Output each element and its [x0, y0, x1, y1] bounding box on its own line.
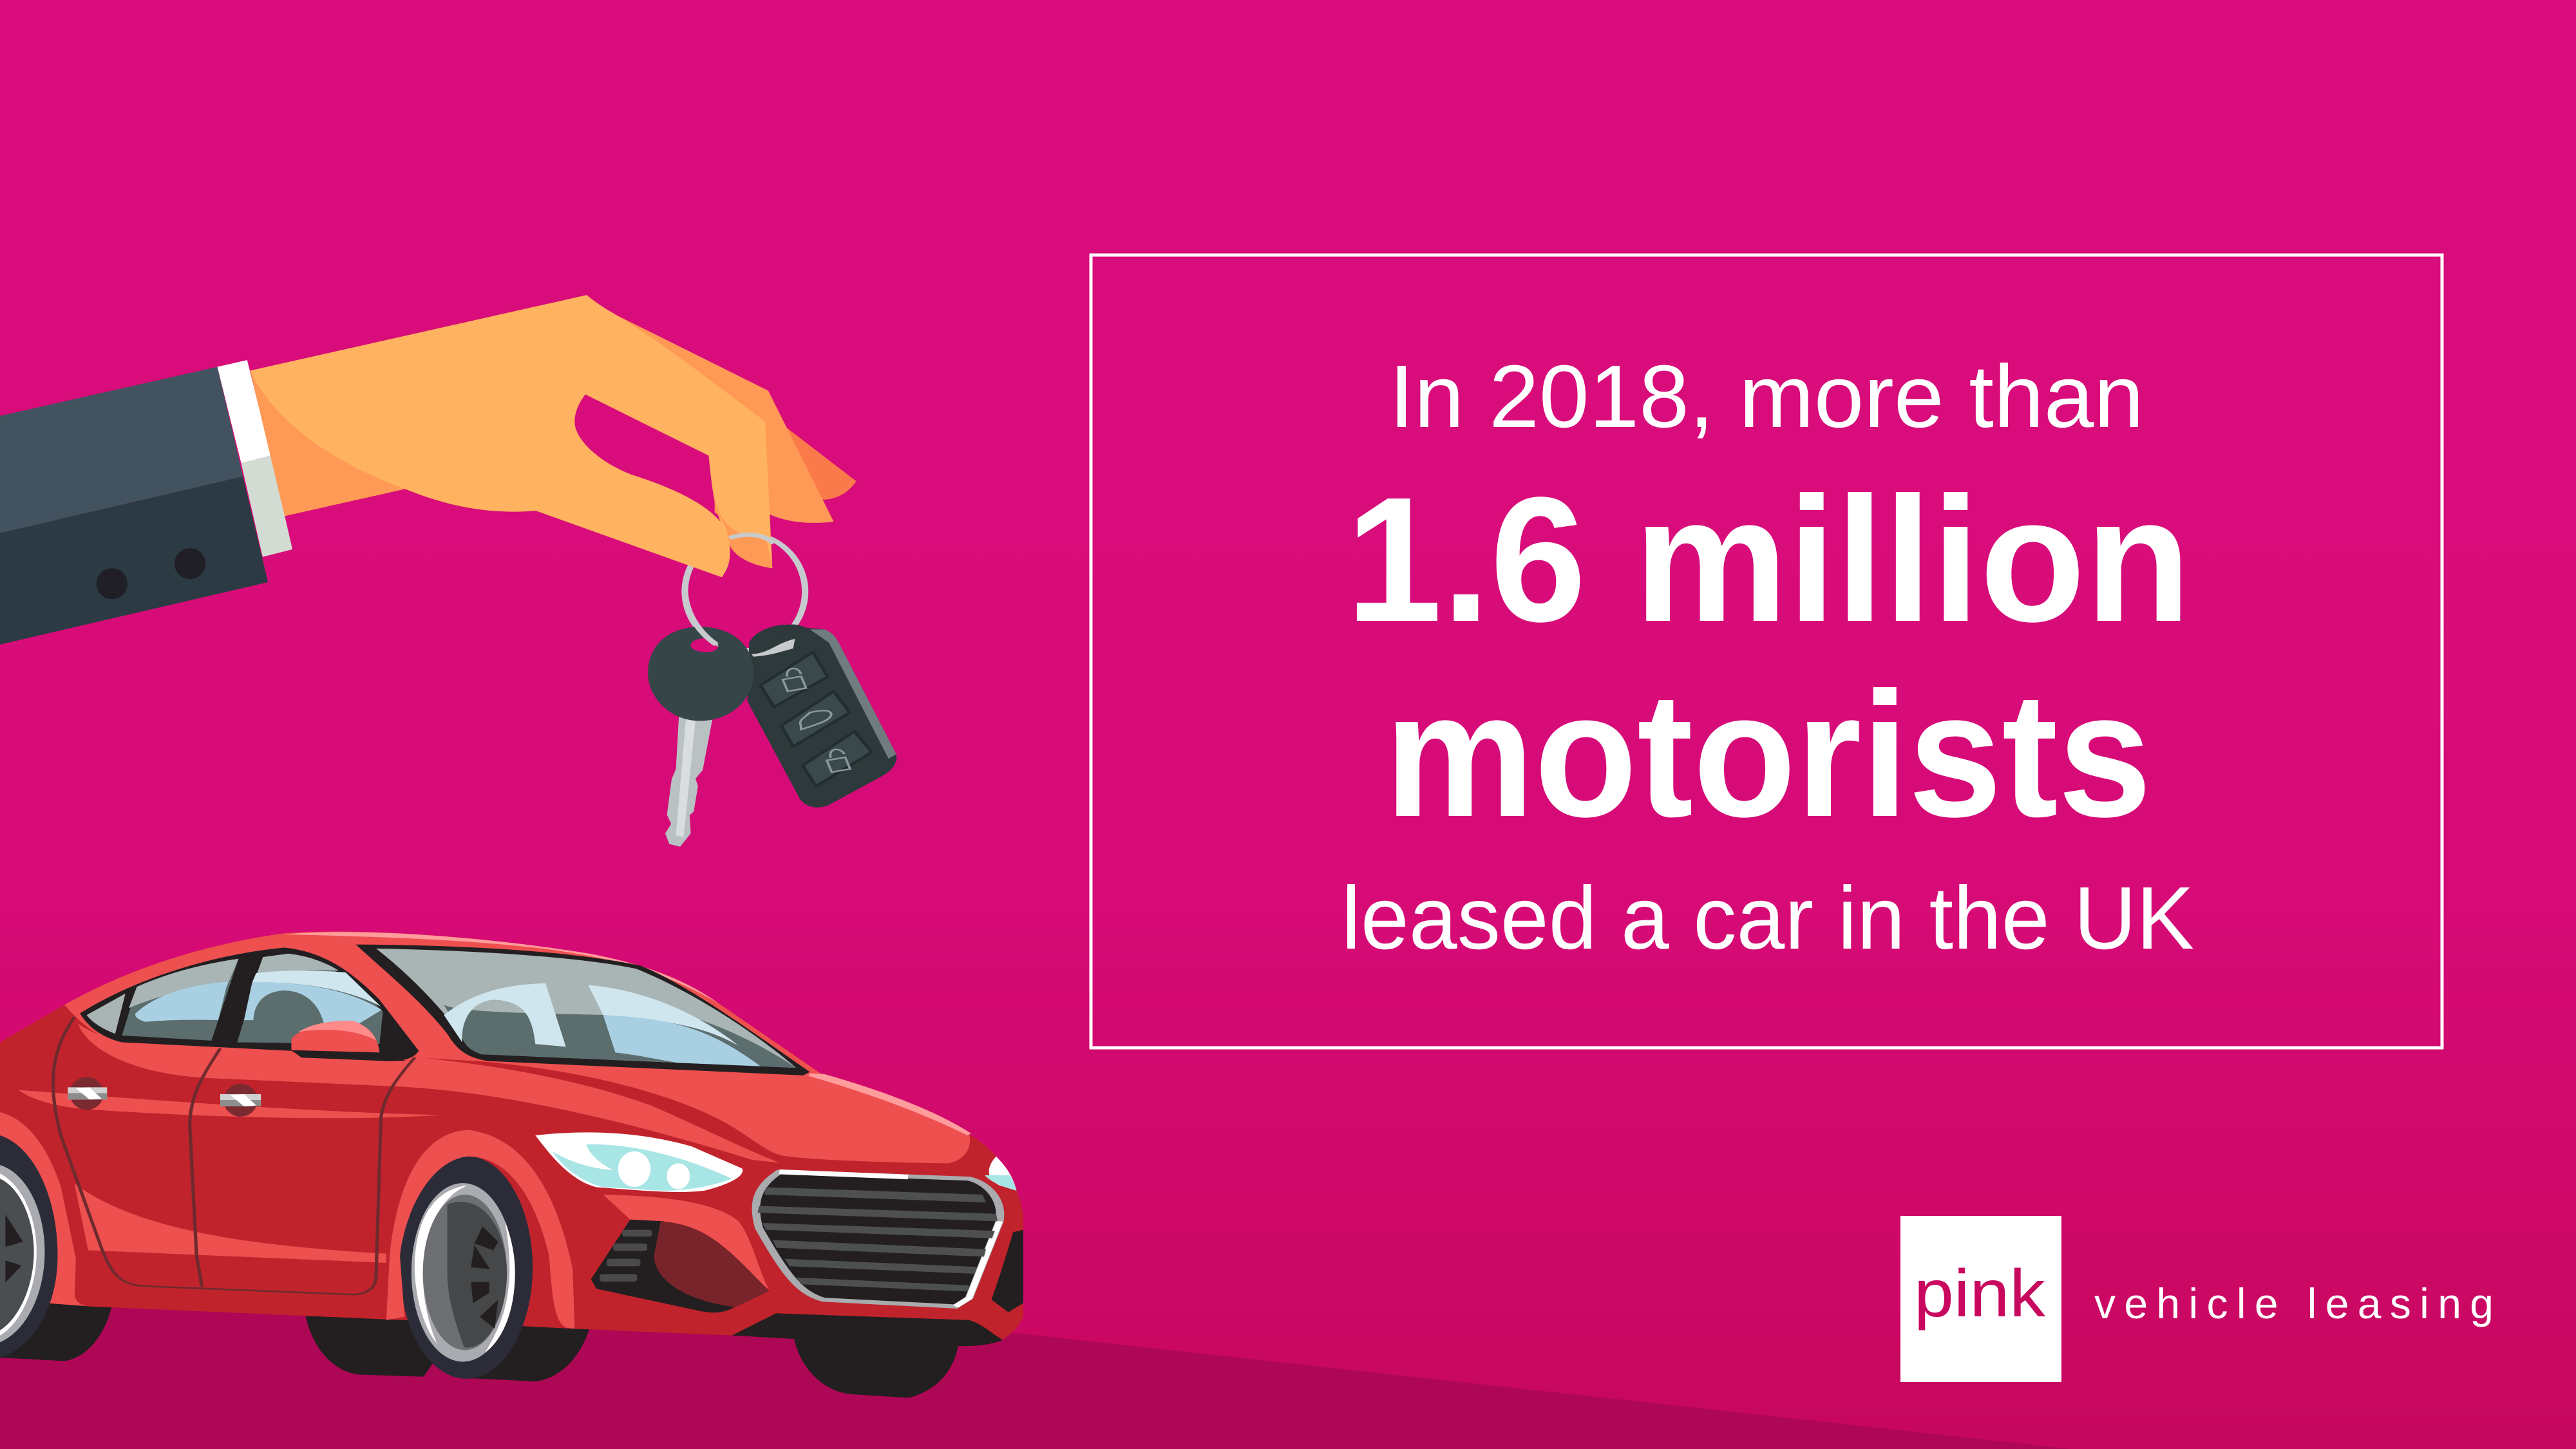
key blade highlight	[676, 718, 696, 837]
window frame	[80, 947, 419, 1061]
air intake	[591, 1220, 769, 1312]
wing mirror	[291, 1021, 406, 1061]
rear wheel arch	[0, 1112, 91, 1307]
car body	[0, 932, 1023, 1346]
illustration: hand holding keys	[0, 295, 896, 847]
far finger	[786, 427, 857, 500]
wrist shadow	[250, 370, 417, 516]
front lip	[732, 1313, 1003, 1346]
hand	[250, 295, 772, 577]
radiator grille	[756, 1172, 1000, 1307]
ring through key head	[685, 592, 716, 645]
windscreen frame	[355, 945, 810, 1075]
panel: statistic frame	[1091, 255, 2442, 1048]
rear wheel	[0, 1135, 57, 1358]
windscreen glass	[376, 949, 796, 1068]
front door glass	[237, 954, 383, 1044]
logo tagline: vehicle leasing	[2094, 1280, 2494, 1327]
inner front tyre	[305, 1313, 461, 1377]
key fob	[747, 625, 896, 808]
hood	[419, 1057, 970, 1163]
illustration: red car	[0, 932, 1023, 1398]
windscreen	[355, 945, 810, 1075]
sleeve lower	[0, 477, 268, 645]
door handles	[68, 1077, 261, 1117]
logo tile	[1900, 1216, 2061, 1382]
road	[0, 1222, 2071, 1449]
sleeve upper	[0, 367, 243, 533]
far headlight	[985, 1157, 1016, 1191]
headline number: 1.6 million	[1346, 460, 2191, 659]
wheel inner	[448, 1202, 507, 1348]
front bumper highlight	[603, 1195, 769, 1289]
rim edge	[412, 1183, 515, 1361]
intro line: In 2018, more than	[1389, 347, 2144, 446]
rim white left	[415, 1186, 468, 1344]
side windows	[80, 947, 419, 1061]
closing line: leased a car in the UK	[1341, 869, 2194, 968]
spokes	[471, 1226, 498, 1329]
roof highlight	[285, 932, 718, 1003]
rear door glass	[122, 959, 238, 1041]
logo wordmark: pink	[1914, 1256, 2046, 1331]
far front tyre	[793, 1334, 959, 1398]
index fingertip shade	[715, 497, 772, 568]
rear quarter glass	[87, 994, 126, 1034]
lower sill sweep	[75, 1184, 386, 1263]
logo	[1900, 1216, 2494, 1382]
sleeve buttons	[97, 548, 205, 599]
tyre sidewall	[400, 1156, 533, 1379]
wheel disc	[423, 1195, 507, 1350]
headline noun: motorists	[1385, 656, 2152, 854]
keyring	[685, 533, 805, 650]
near front tyre tread	[468, 1221, 591, 1381]
door seams	[53, 1017, 415, 1294]
roof	[64, 932, 824, 1078]
middle finger and back of hand shadow	[596, 303, 834, 523]
rear wheel tyre	[0, 1221, 112, 1361]
far air intake	[992, 1230, 1023, 1312]
shirt cuff	[218, 360, 292, 557]
headlight	[535, 1132, 743, 1192]
ring over finger	[730, 535, 774, 544]
key blade	[665, 716, 712, 847]
hood highlight	[810, 1075, 969, 1134]
front wheel arch	[386, 1130, 574, 1329]
shoulder light band	[78, 1023, 779, 1162]
text: statistic	[1341, 347, 2194, 968]
rim white right	[485, 1221, 515, 1352]
front wheel	[400, 1156, 533, 1379]
side crease highlight	[19, 1090, 440, 1118]
key head	[648, 627, 753, 721]
